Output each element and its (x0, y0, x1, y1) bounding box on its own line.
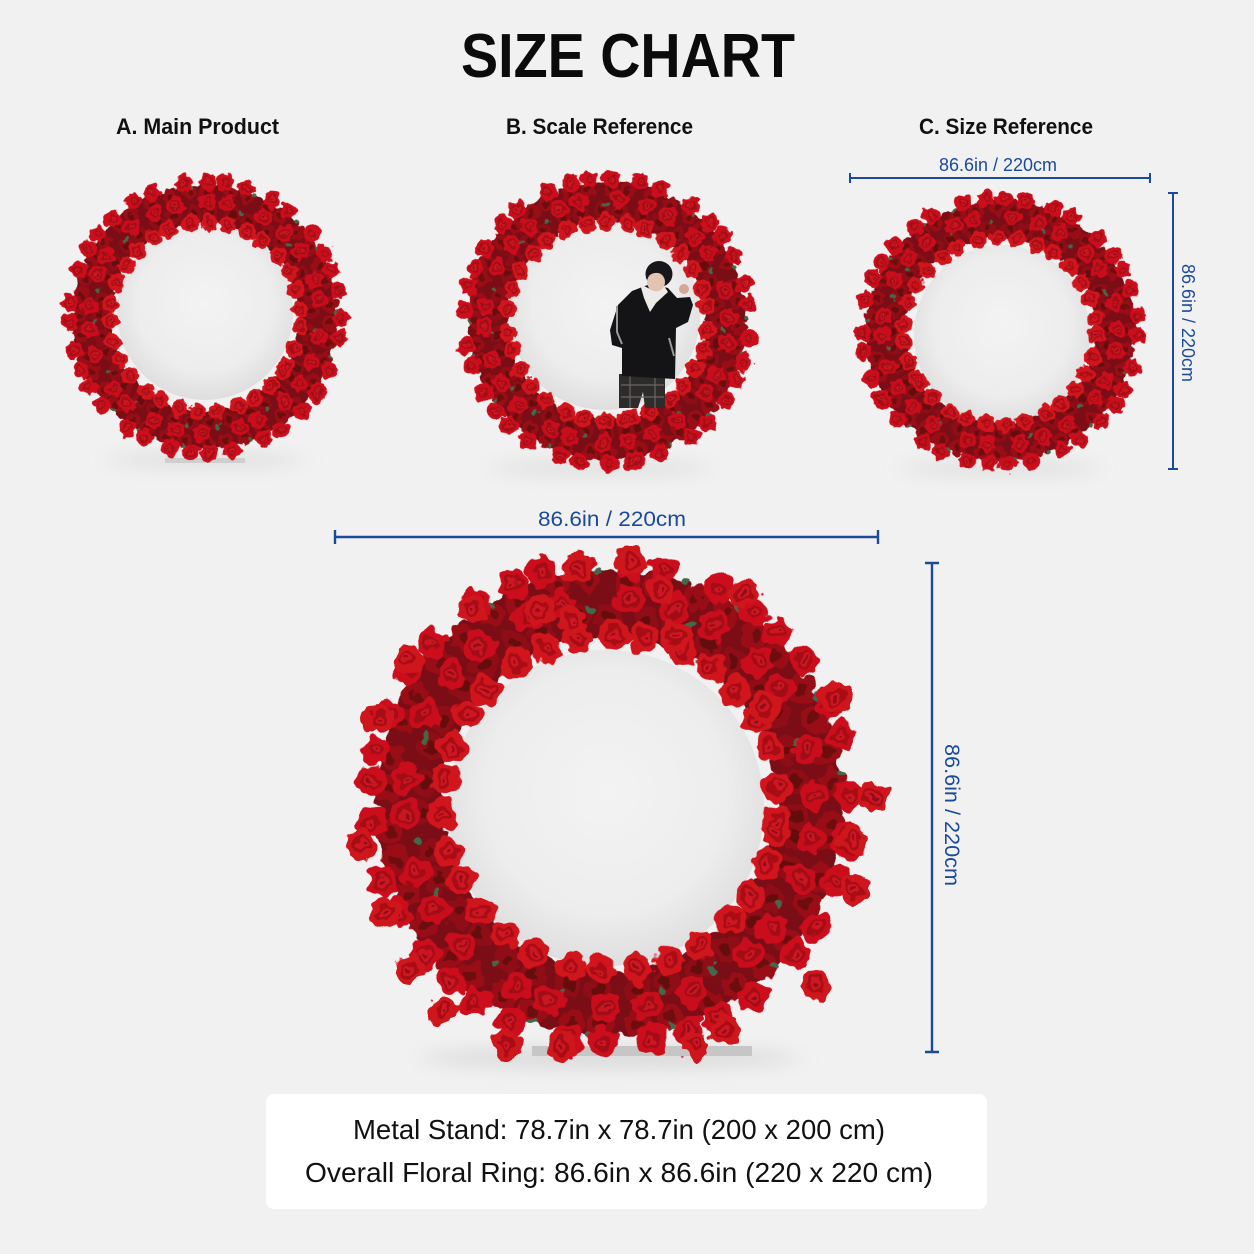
dimension: height of size reference (1168, 193, 1198, 469)
title: SIZE CHART (461, 22, 795, 91)
overall ring size: Overall Floral Ring: 86.6in x 86.6in (220 x 220 cm) (305, 1157, 933, 1188)
dimension: width of large wreath: 86.6in / 220cm (538, 508, 686, 531)
dimension: height of large wreath: 86.6in / 220cm (940, 744, 963, 886)
scale person (610, 261, 693, 408)
panel: size summary (266, 1094, 987, 1209)
dimension: top width of size reference (850, 155, 1150, 183)
heading: C. Size Reference: C. Size Reference (919, 114, 1093, 139)
dimension: height of size reference: 86.6in / 220cm (1178, 264, 1198, 382)
heading: A. Main Product: A. Main Product (116, 114, 280, 139)
extra roses on outline (347, 547, 888, 1061)
heading: B. Scale Reference: B. Scale Reference (506, 114, 693, 139)
panel: main product wreath (16, 128, 394, 506)
panel: large floral ring (332, 525, 888, 1081)
panel: size reference wreath (811, 149, 1189, 513)
dimension: top width of size reference: 86.6in / 220cm (939, 155, 1057, 175)
dimension: width of large wreath (335, 508, 878, 544)
panel: scale reference wreath (442, 156, 772, 486)
dimension: height of large wreath (925, 563, 963, 1052)
metal stand size: Metal Stand: 78.7in x 78.7in (200 x 200 cm) (353, 1114, 885, 1145)
